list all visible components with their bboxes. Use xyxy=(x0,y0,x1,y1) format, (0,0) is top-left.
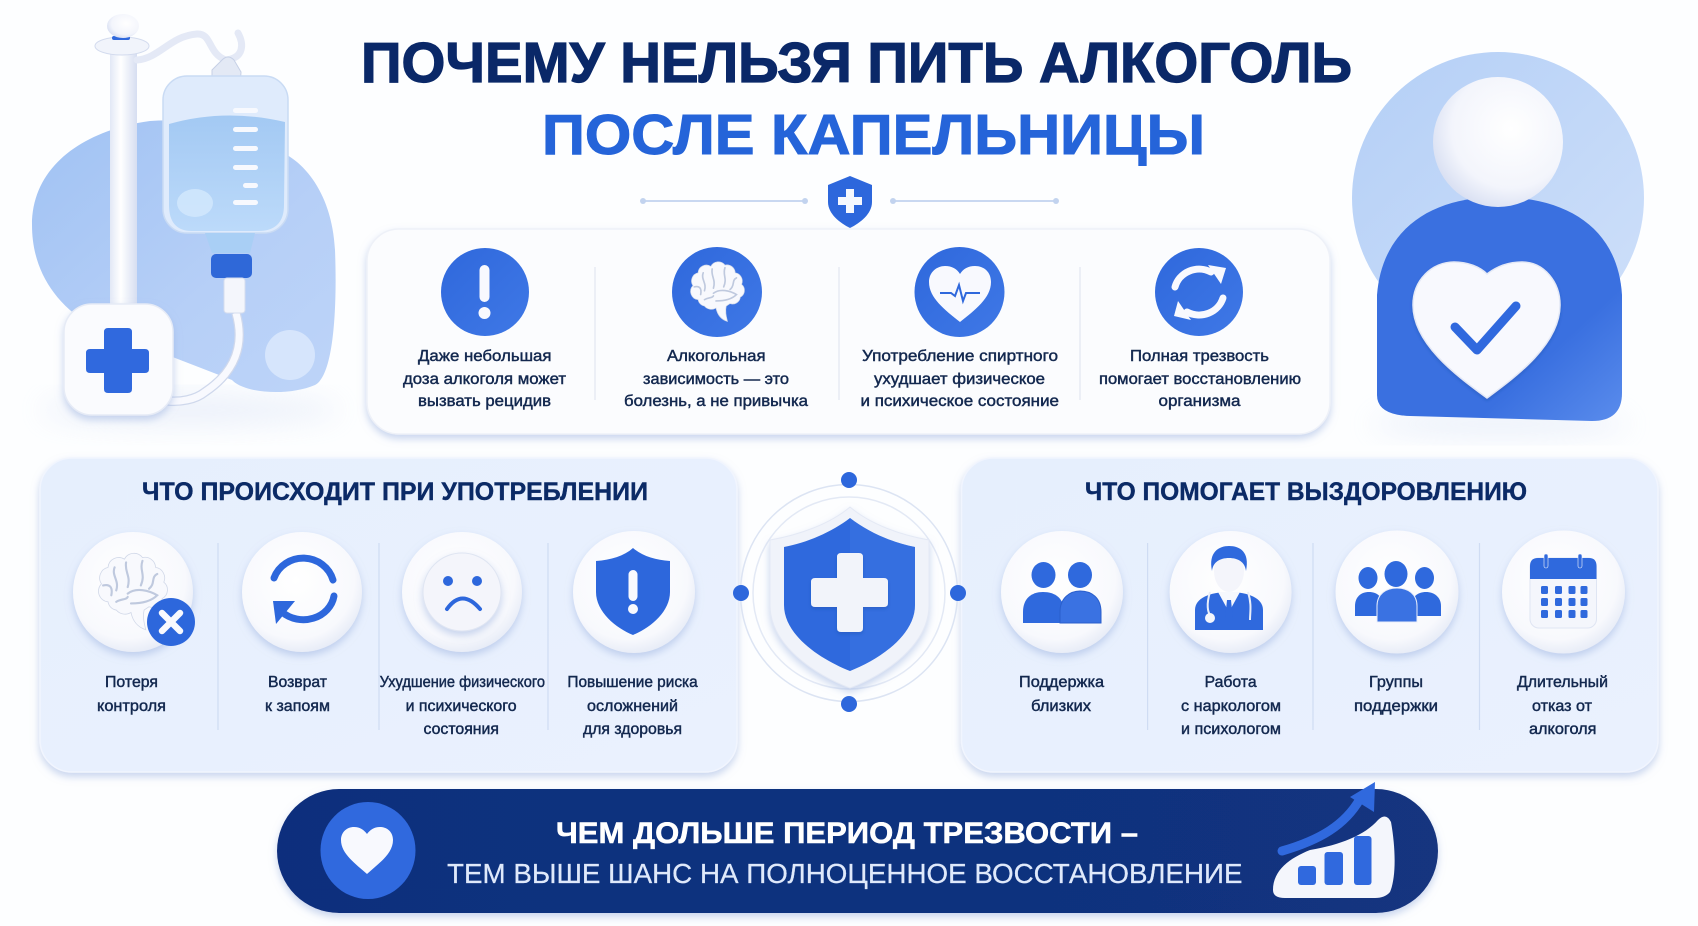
item: relapse: Возврат xyxy=(268,674,328,691)
tube xyxy=(168,313,239,401)
banner text: ТЕМ ВЫШЕ ШАНС НА ПОЛНОЦЕННОЕ ВОССТАНОВЛЕНИЕ xyxy=(447,858,1242,889)
body xyxy=(1377,197,1622,421)
bag neck xyxy=(205,233,255,253)
fact 1: small dose: доза алкоголя может xyxy=(403,371,567,388)
panel: what helps recovery xyxy=(962,458,1658,772)
item: long abstinence: Длительный xyxy=(1517,674,1608,691)
fact 3: health xyxy=(860,247,1059,410)
fact 2: addiction: зависимость — это xyxy=(643,371,789,388)
item: long abstinence: алкоголя xyxy=(1529,721,1596,738)
item: loss of control: контроля xyxy=(97,698,166,715)
item: worsening condition: Ухудшение физического xyxy=(380,674,545,691)
item: family support xyxy=(1001,531,1123,715)
fact 4: sobriety: организма xyxy=(1158,393,1241,410)
fact 4: sobriety: Полная трезвость xyxy=(1130,348,1269,365)
heading: ЧТО ПРОИСХОДИТ ПРИ УПОТРЕБЛЕНИИ xyxy=(142,478,648,506)
item: family support: Поддержка xyxy=(1019,674,1104,691)
item: worsening condition: и психического xyxy=(406,698,517,715)
item: loss of control: Потеря xyxy=(105,674,158,691)
item: narcologist and psychologist: с наркологом xyxy=(1181,698,1281,715)
title xyxy=(361,31,1352,167)
bag hanger xyxy=(212,57,241,88)
illustration: IV drip stand xyxy=(32,14,336,415)
tube connector xyxy=(224,278,245,313)
item: loss of control xyxy=(73,532,195,715)
item: risk of complications: осложнений xyxy=(587,698,678,715)
title: ПОСЛЕ КАПЕЛЬНИЦЫ xyxy=(542,103,1205,167)
center emblem: shield xyxy=(733,472,966,712)
item: support groups: поддержки xyxy=(1354,698,1438,715)
icon: heart badge xyxy=(320,802,416,899)
panel: what happens when drinking xyxy=(40,458,737,772)
panel: key facts xyxy=(367,229,1330,434)
heart xyxy=(1413,262,1560,398)
soft background glows xyxy=(40,396,1630,434)
pole xyxy=(110,48,137,310)
banner: sobriety message xyxy=(277,782,1438,913)
check mark xyxy=(1455,306,1516,350)
title: ПОЧЕМУ НЕЛЬЗЯ ПИТЬ АЛКОГОЛЬ xyxy=(361,31,1352,95)
fact 4: sobriety: помогает восстановлению xyxy=(1099,371,1301,388)
banner text xyxy=(447,817,1242,889)
IV bag xyxy=(163,76,288,233)
illustration: person with heart xyxy=(1352,52,1644,421)
item: worsening condition xyxy=(380,532,545,738)
fact 2: addiction: Алкогольная xyxy=(667,348,766,365)
tube highlight xyxy=(168,313,239,401)
fact 1: small dose xyxy=(403,248,567,410)
item: narcologist and psychologist: и психологом xyxy=(1181,721,1281,738)
fact 2: addiction: болезнь, а не привычка xyxy=(624,393,808,410)
fact 3: health: ухудшает физическое xyxy=(874,371,1045,388)
fact 4: sobriety xyxy=(1099,248,1301,410)
hook arm xyxy=(137,33,242,60)
icon: growth chart xyxy=(1273,782,1395,898)
item: long abstinence xyxy=(1502,530,1625,738)
head xyxy=(1433,77,1563,207)
fact 3: health: и психическое состояние xyxy=(860,393,1059,410)
item: risk of complications: для здоровья xyxy=(583,721,682,738)
fact 2: addiction xyxy=(624,247,808,410)
blob highlight circle xyxy=(265,330,315,380)
item: narcologist and psychologist xyxy=(1170,531,1292,738)
item: narcologist and psychologist: Работа xyxy=(1205,674,1257,691)
item: relapse: к запоям xyxy=(265,698,330,715)
pole ring and knob xyxy=(95,14,149,55)
blue blob backdrop xyxy=(32,120,336,392)
item: worsening condition: состояния xyxy=(424,721,499,738)
heading: ЧТО ПОМОГАЕТ ВЫЗДОРОВЛЕНИЮ xyxy=(1085,478,1527,506)
item: support groups xyxy=(1336,530,1458,715)
title divider with shield xyxy=(640,176,1059,228)
plus tile xyxy=(64,304,173,415)
backdrop circle xyxy=(1352,52,1644,344)
item: relapse xyxy=(242,532,362,715)
banner text: ЧЕМ ДОЛЬШЕ ПЕРИОД ТРЕЗВОСТИ – xyxy=(556,817,1138,850)
item: risk of complications xyxy=(567,531,698,738)
item: risk of complications: Повышение риска xyxy=(567,674,698,691)
item: long abstinence: отказ от xyxy=(1532,698,1593,715)
fact 1: small dose: Даже небольшая xyxy=(418,348,552,365)
item: family support: близких xyxy=(1031,698,1091,715)
blue cap xyxy=(211,254,252,278)
item: support groups: Группы xyxy=(1369,674,1423,691)
fact 1: small dose: вызвать рецидив xyxy=(418,393,551,410)
fact 3: health: Употребление спиртного xyxy=(862,348,1058,365)
